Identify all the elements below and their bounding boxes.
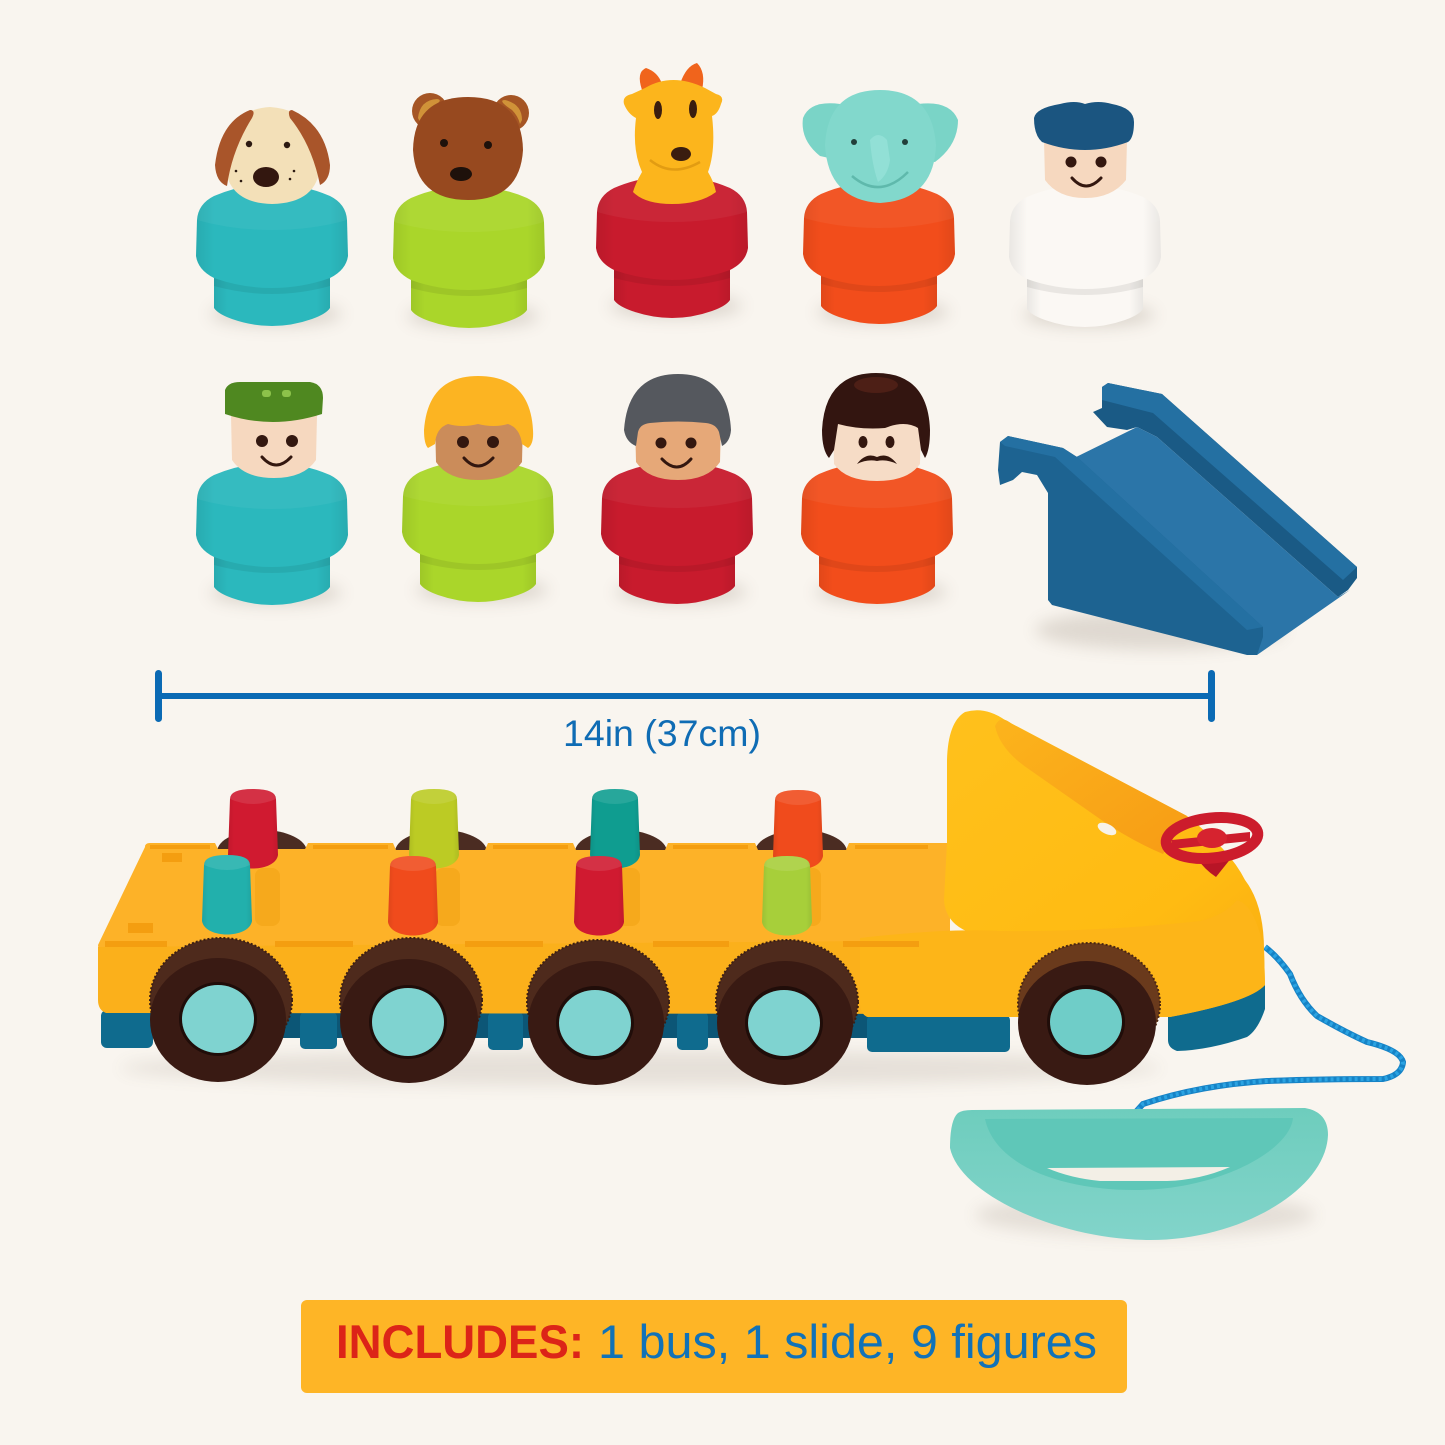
dimension label: 14in (37cm) xyxy=(563,713,761,754)
cab window xyxy=(995,719,1187,854)
wheel 4 xyxy=(716,940,858,1085)
ramp near rail top xyxy=(1000,436,1263,630)
icon: yellow hair head xyxy=(424,376,533,480)
wheel 1 xyxy=(150,938,292,1082)
figure: giraffe on red base xyxy=(596,63,748,318)
icon: giraffe head xyxy=(624,63,722,204)
bus xyxy=(98,710,1265,1086)
figure: police officer on white base xyxy=(1009,102,1161,327)
icon: grey hair head xyxy=(624,374,731,480)
peg reflections xyxy=(255,868,821,926)
figure: green cap person on teal base xyxy=(196,382,348,605)
cab xyxy=(860,710,1265,1017)
ramp side face xyxy=(998,436,1263,655)
figure: yellow hair person on lime base xyxy=(402,376,554,602)
figure: dog on teal base xyxy=(196,107,348,326)
slide ramp xyxy=(998,383,1357,655)
icon: bear head xyxy=(412,93,529,200)
wheel 3 xyxy=(527,940,669,1085)
icon: dog head xyxy=(215,107,330,204)
figure: moustached person on orange base xyxy=(801,373,953,604)
chassis xyxy=(101,985,1265,1052)
back row wheels xyxy=(217,830,847,874)
bus deck xyxy=(98,843,950,960)
figure: grey hair person on red base xyxy=(601,374,753,604)
dimension line xyxy=(155,670,1215,722)
icon: green cap head xyxy=(225,382,323,478)
pull cord xyxy=(1134,947,1403,1114)
front row pegs xyxy=(202,855,812,936)
icon: moustached head xyxy=(822,373,930,481)
steering wheel xyxy=(1164,813,1260,877)
back row pegs xyxy=(228,789,823,870)
wheel 2 xyxy=(340,938,482,1083)
figure: elephant on orange base xyxy=(803,90,958,324)
ramp far rail xyxy=(1093,383,1357,597)
ground shadow xyxy=(120,1050,1160,1086)
figure: bear on lime base xyxy=(393,93,545,328)
cab window gap xyxy=(1096,820,1118,838)
includes label: INCLUDES: xyxy=(336,1315,584,1368)
deck side panel xyxy=(98,940,1000,1014)
deck square holes and slots xyxy=(128,845,928,933)
icon: elephant head xyxy=(803,90,958,203)
pull handle xyxy=(950,1108,1328,1240)
ramp sliding surface xyxy=(1070,427,1350,655)
includes list: 1 bus, 1 slide, 9 figures xyxy=(598,1315,1097,1368)
includes banner xyxy=(301,1300,1127,1393)
wheel 5 xyxy=(1018,943,1160,1085)
cab lower body shading xyxy=(860,900,1265,1017)
side lip slots xyxy=(105,941,919,947)
icon: officer head xyxy=(1034,102,1134,198)
